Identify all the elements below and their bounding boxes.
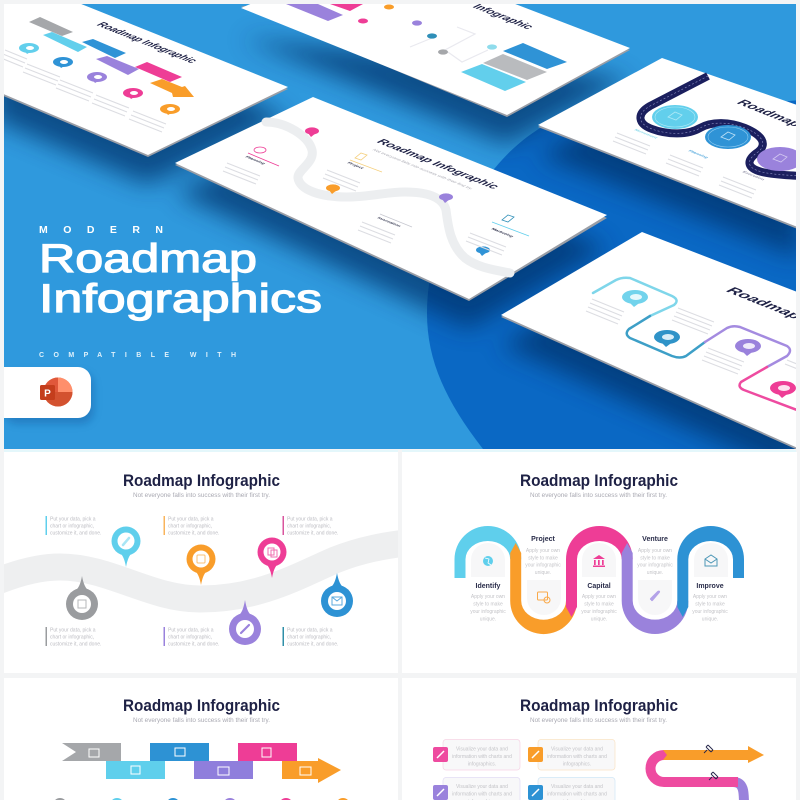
step: Capital: Apply your own [582, 594, 616, 600]
step: Capital: your infographic [581, 609, 617, 615]
hero eyebrow: MODERN [39, 224, 163, 236]
pin: attachment [112, 526, 140, 567]
step: Venture [637, 536, 673, 576]
step: Capital: Capital [587, 583, 611, 590]
body lines [1, 50, 166, 132]
route: pink segment [650, 755, 738, 782]
subheading: Not everyone falls into success with their first try. [530, 492, 667, 499]
text block: top right [282, 516, 338, 536]
stage labels [244, 147, 529, 238]
top bars [286, 4, 394, 24]
text block: bottom middle: chart or infographic, [168, 634, 212, 640]
navy road [640, 76, 800, 176]
step: Identify: Apply your own [471, 594, 505, 600]
serpentine band [454, 526, 744, 634]
step: Project: Project [531, 536, 556, 543]
text block: top left: customize it, and done. [50, 530, 101, 536]
text block: top middle: chart or infographic, [168, 524, 212, 530]
slide: flag roadmap [0, 0, 288, 157]
text block: bottom left: customize it, and done. [50, 642, 101, 648]
pin: note [186, 544, 216, 585]
step: Identify: Identify [476, 583, 501, 590]
hero title: Infographics [39, 277, 322, 321]
arrow segments [62, 743, 341, 783]
card: blue [528, 778, 615, 800]
step: Identify [470, 583, 506, 622]
card: purple [433, 778, 520, 800]
panel: winding road timeline [0, 450, 415, 673]
step: Capital [581, 583, 617, 622]
icon: briefcase [538, 592, 550, 603]
pin: pencil [229, 600, 261, 645]
text block: top middle: Put your data, pick a [168, 516, 214, 522]
step: Venture: style to make [640, 556, 670, 562]
body lines [586, 299, 800, 374]
text block: top middle: customize it, and done. [168, 530, 219, 536]
pin: copy [258, 538, 286, 578]
slide: line roadmap [241, 2, 630, 117]
step: Improve [692, 583, 728, 622]
stage labels: Planning [687, 149, 710, 159]
text block: top right: customize it, and done. [287, 530, 338, 536]
card: pink: Visualize your data and [456, 746, 508, 752]
route: purple segment [733, 782, 744, 800]
step: Project: your infographic [525, 562, 561, 568]
icon: paperclip [651, 592, 659, 600]
step: Improve: your infographic [692, 609, 728, 615]
step: Venture: Apply your own [638, 548, 672, 554]
flag steps [29, 17, 194, 97]
subheading: Not everyone falls into success with their first try. [133, 492, 270, 499]
road [0, 542, 415, 599]
step: Improve: style to make [695, 602, 725, 608]
step: Venture: your infographic [637, 562, 673, 568]
colour boxes [461, 43, 567, 91]
heading: Roadmap Infographic [123, 471, 280, 490]
text block: bottom middle: Put your data, pick a [168, 628, 214, 634]
slide: navy road [538, 58, 800, 230]
card: pink: information with charts and [452, 754, 512, 760]
slide shadows [4, 28, 796, 449]
road centre line [640, 76, 800, 176]
stage labels: Project [346, 161, 366, 170]
icon: PowerPoint: P [44, 388, 51, 400]
text block: top right: Put your data, pick a [287, 516, 333, 522]
text block: top right: chart or infographic, [287, 524, 331, 530]
text block: top left: Put your data, pick a [50, 516, 96, 522]
heading: Roadmap Infographic [123, 696, 280, 715]
step: Identify: your infographic [470, 609, 506, 615]
text block: top left [46, 516, 101, 536]
step: Capital: style to make [584, 602, 614, 608]
card: blue: Visualize your data and [551, 784, 603, 790]
subheading: Not everyone falls into success with their first try. [370, 148, 475, 191]
body lines [613, 133, 756, 198]
badge shadow [4, 372, 94, 424]
card: blue: information with charts and [547, 792, 607, 798]
stage labels: Movement [633, 128, 660, 139]
step: Capital: unique. [591, 616, 607, 622]
panel: staggered arrow [4, 678, 398, 800]
stage labels: Marketing [490, 227, 515, 238]
text block: bottom right: customize it, and done. [287, 642, 338, 648]
text block: top middle [164, 516, 219, 536]
hero title: Roadmap [39, 237, 257, 281]
text block: top left: chart or infographic, [50, 524, 94, 530]
icon: pin two [709, 772, 718, 780]
card: pink: infographics. [468, 762, 496, 768]
panel: pinned route [402, 678, 797, 800]
pins [19, 43, 180, 115]
text block: bottom left: Put your data, pick a [50, 628, 96, 634]
stage circles [652, 105, 800, 171]
icon tiles [471, 543, 728, 615]
step: Improve: Improve [696, 583, 724, 590]
pin: calendar [66, 576, 98, 620]
hero banner [0, 0, 800, 478]
road [266, 122, 510, 273]
route segments [593, 278, 797, 410]
card: orange: infographics. [563, 762, 591, 768]
text block: bottom middle: customize it, and done. [168, 642, 219, 648]
text block: bottom right: Put your data, pick a [287, 628, 333, 634]
stage labels: Planning [244, 155, 267, 165]
card: purple: Visualize your data and [456, 784, 508, 790]
text block: bottom right [282, 627, 338, 648]
heading: Roadmap Infographic [374, 138, 503, 190]
step: Identify: unique. [480, 616, 496, 622]
route pins [412, 20, 497, 55]
slide: outline route [501, 232, 800, 451]
text block: bottom middle [164, 627, 219, 648]
icon: bank [593, 555, 605, 567]
road pins [305, 127, 490, 256]
subheading: Not everyone falls into success with their first try. [530, 717, 667, 724]
body lines [223, 163, 506, 255]
text block: bottom right: chart or infographic, [287, 634, 331, 640]
PowerPoint badge [4, 367, 91, 418]
card: purple: information with charts and [452, 792, 512, 798]
step: Venture: unique. [647, 570, 663, 576]
panel: serpentine roadmap [402, 450, 797, 673]
icon: globe [483, 556, 493, 566]
step: Improve: unique. [702, 616, 718, 622]
card: orange: Visualize your data and [551, 746, 603, 752]
step: Project: unique. [535, 570, 551, 576]
step: Improve: Apply your own [693, 594, 727, 600]
subheading: Not everyone falls into success with their first try. [133, 717, 270, 724]
heading: Roadmap Infographic [94, 21, 201, 65]
text block: bottom left: chart or infographic, [50, 634, 94, 640]
route line [410, 27, 488, 62]
dark blue circle background [427, 100, 800, 449]
heading: Roadmap Infographic [520, 471, 678, 490]
compatible label: COMPATIBLE WITH [39, 352, 236, 359]
step: Project [525, 536, 561, 576]
step: Project: Apply your own [526, 548, 560, 554]
icon: open envelope [705, 555, 717, 566]
route pins [622, 290, 796, 398]
step: Venture: Venture [642, 536, 668, 543]
stage labels [633, 128, 767, 181]
step: Project: style to make [528, 556, 558, 562]
card: orange: information with charts and [547, 754, 607, 760]
stage labels: Execution [741, 170, 767, 181]
card: orange [528, 740, 615, 770]
pin row tops [53, 798, 350, 800]
hero title [39, 237, 322, 321]
heading: Infographic [470, 3, 537, 31]
pin: mail [321, 573, 353, 617]
route: orange arrow [663, 746, 764, 763]
slide: winding road [175, 97, 607, 301]
icon: pin one [704, 745, 713, 753]
step: Identify: style to make [473, 602, 503, 608]
stage labels: Innovation [376, 216, 403, 227]
text block: bottom left [46, 627, 101, 648]
segment icons [89, 748, 311, 775]
card: pink [433, 740, 520, 770]
heading: Roadmap Infographic [520, 696, 678, 715]
